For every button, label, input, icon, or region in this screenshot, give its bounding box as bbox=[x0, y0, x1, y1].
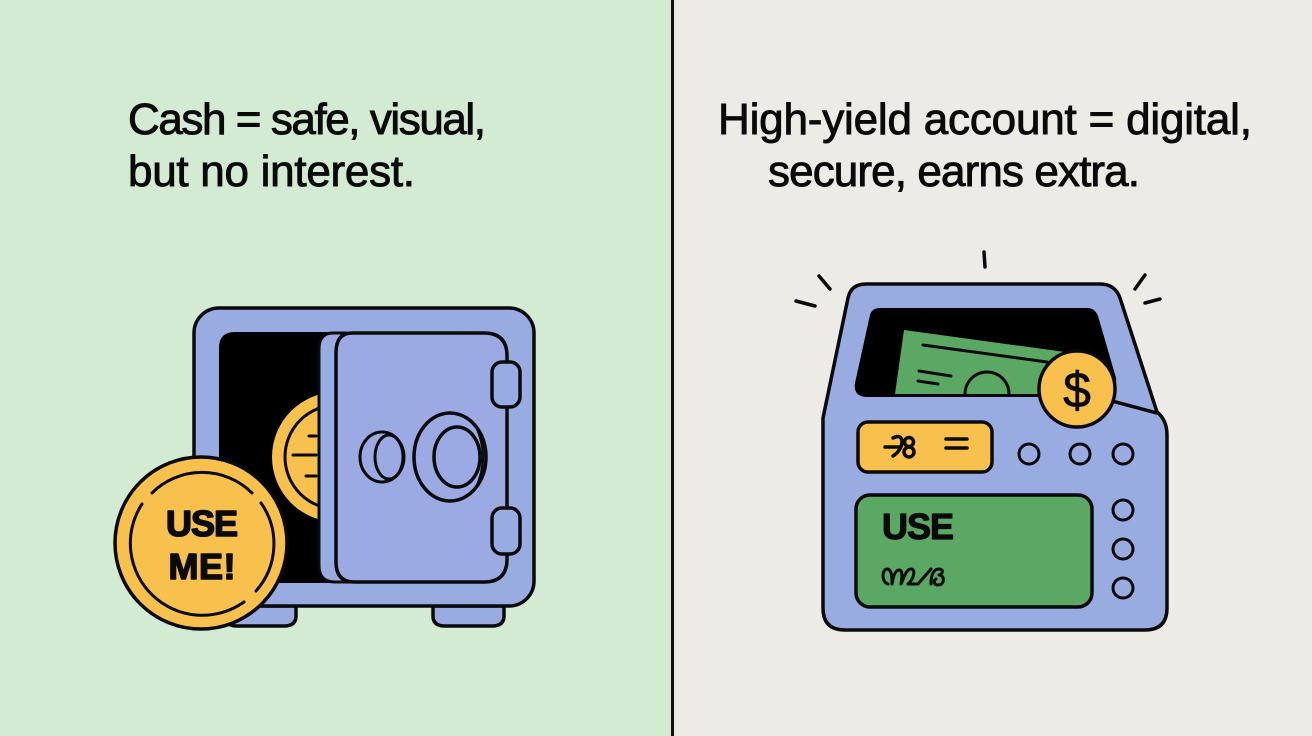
dollar coin bbox=[1039, 351, 1115, 427]
panel: cash background bbox=[0, 0, 672, 736]
device body bbox=[823, 284, 1167, 630]
center divider bbox=[671, 0, 674, 736]
flap line bbox=[1112, 401, 1157, 413]
coin: use me bbox=[115, 457, 287, 629]
hinges bbox=[492, 362, 520, 407]
heading: cash: but no interest. bbox=[128, 147, 415, 196]
sparkle rays bbox=[796, 252, 1160, 306]
heading: high-yield account: High-yield account = digital, bbox=[718, 95, 1252, 144]
safe door bbox=[319, 333, 520, 582]
icon: safe with coin bbox=[115, 308, 534, 629]
large dial bbox=[414, 413, 486, 501]
icon: digital account device bbox=[796, 252, 1167, 630]
small dial bbox=[360, 432, 404, 482]
heading: high-yield account bbox=[718, 95, 1252, 196]
banknote bbox=[895, 330, 1065, 396]
dollar coin: $ bbox=[1063, 362, 1091, 418]
coin: use me: ME! bbox=[168, 546, 236, 587]
coin inside safe bbox=[272, 392, 402, 522]
buttons bbox=[1019, 444, 1133, 598]
coin: use me: USE bbox=[166, 503, 238, 544]
green screen: USE bbox=[882, 506, 954, 547]
heading: cash: Cash = safe, visual, bbox=[128, 95, 486, 144]
panel: high-yield account background bbox=[672, 0, 1312, 736]
green screen bbox=[856, 495, 1092, 607]
slot bbox=[855, 308, 1116, 397]
heading: high-yield account: secure, earns extra. bbox=[768, 147, 1140, 196]
safe feet bbox=[225, 606, 504, 626]
safe cavity bbox=[219, 332, 360, 583]
yellow display bbox=[858, 422, 992, 472]
safe body bbox=[194, 308, 534, 606]
heading: cash bbox=[128, 95, 486, 196]
